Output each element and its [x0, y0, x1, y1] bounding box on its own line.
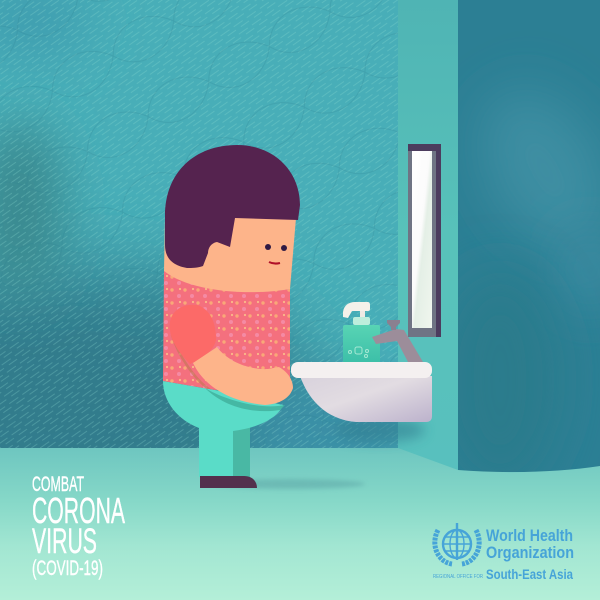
tap	[372, 320, 423, 362]
arm	[193, 347, 293, 405]
WHO logo	[433, 523, 574, 582]
sleeve	[170, 305, 216, 364]
back leg	[233, 424, 250, 478]
shoe	[200, 476, 257, 488]
face	[164, 218, 296, 292]
WHO logo: Organization	[486, 543, 574, 562]
title text	[32, 473, 125, 580]
WHO logo: World Health	[486, 526, 573, 545]
title text: CORONA	[32, 490, 125, 531]
title text: (COVID-19)	[32, 557, 103, 580]
soap bottle	[343, 302, 380, 363]
emblem	[435, 523, 479, 564]
trousers	[163, 381, 283, 477]
shirt	[163, 271, 290, 390]
sink	[291, 362, 432, 442]
hair	[165, 145, 300, 268]
mouth	[269, 262, 280, 264]
WHO logo: REGIONAL OFFICE FOR	[433, 574, 483, 580]
floor shadow	[215, 479, 365, 489]
background wall	[0, 0, 398, 448]
wall column	[398, 0, 458, 480]
arm shadow	[205, 388, 285, 411]
title text: COMBAT	[32, 473, 84, 496]
character	[160, 145, 365, 489]
WHO logo: South-East Asia	[486, 566, 573, 582]
floor	[0, 448, 600, 600]
dark wall panel	[458, 0, 600, 472]
title text: VIRUS	[32, 522, 97, 561]
eyes	[265, 244, 287, 251]
mirror	[408, 144, 441, 337]
